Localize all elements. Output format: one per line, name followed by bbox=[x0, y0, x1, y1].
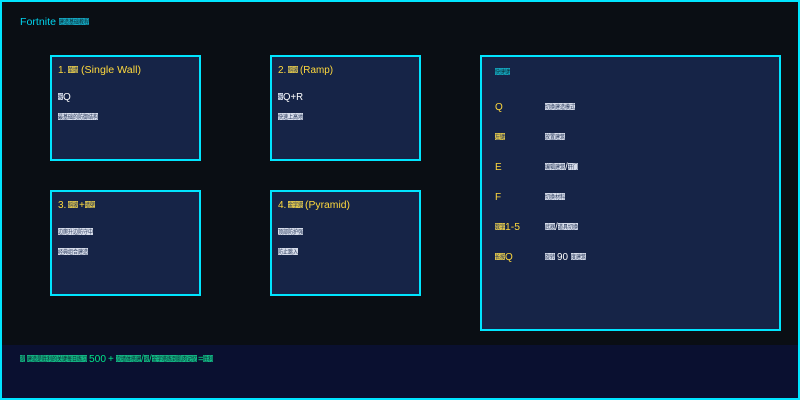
description line one bbox=[278, 228, 303, 236]
description line one bbox=[58, 228, 93, 236]
key instruction: Q bbox=[63, 92, 71, 103]
heading: ramp: 2. bbox=[278, 65, 286, 76]
description line two: 防止跳入 bbox=[278, 248, 298, 256]
row: F bbox=[495, 192, 565, 203]
row: hold Q bbox=[495, 252, 586, 263]
heading: pyramid bbox=[278, 200, 350, 211]
title bbox=[20, 17, 89, 28]
footer tip: + bbox=[108, 354, 114, 365]
panel: pyramid bbox=[271, 191, 420, 295]
row: E: / bbox=[565, 162, 568, 173]
heading: ramp plus wall: 3. bbox=[58, 200, 66, 211]
row: hold Q: 长按 bbox=[495, 253, 505, 261]
row: hold Q: 旋转 bbox=[545, 253, 555, 261]
row: Q: Q bbox=[495, 102, 503, 113]
row: number keys: 武器 bbox=[545, 223, 555, 231]
heading: pyramid: (Pyramid) bbox=[305, 200, 350, 211]
row: left click bbox=[495, 133, 565, 141]
title: 建造基础教程 bbox=[59, 18, 89, 26]
description bbox=[58, 113, 98, 121]
description line two: 经典组合建造 bbox=[58, 248, 88, 256]
footer tip: / bbox=[149, 354, 152, 365]
row: number keys bbox=[495, 222, 578, 233]
row: E bbox=[495, 162, 578, 173]
heading: single wall: (Single Wall) bbox=[81, 65, 141, 76]
row: hold Q: 度建筑 bbox=[571, 253, 586, 261]
row: Q bbox=[495, 102, 575, 113]
description line two bbox=[58, 248, 88, 256]
footer band bbox=[1, 345, 799, 399]
heading: single wall: 单墙 bbox=[68, 66, 78, 74]
description line two bbox=[278, 248, 298, 256]
heading: ramp: (Ramp) bbox=[300, 65, 333, 76]
key instruction: 按 bbox=[278, 93, 283, 101]
row: left click: 放置建筑 bbox=[545, 133, 565, 141]
description line one: 边爬升边防守中 bbox=[58, 228, 93, 236]
description: 快速上高地 bbox=[278, 113, 303, 121]
key bindings heading bbox=[495, 68, 510, 76]
panel: single wall bbox=[51, 56, 200, 160]
heading: ramp plus wall: 墙壁 bbox=[85, 201, 95, 209]
heading: ramp plus wall: 斜坡 bbox=[68, 201, 78, 209]
row: Q: 切换建造模式 bbox=[545, 103, 575, 111]
description: 最基础的防御结构 bbox=[58, 113, 98, 121]
row: hold Q: Q bbox=[505, 252, 513, 263]
heading: ramp bbox=[278, 65, 333, 76]
footer tip: = bbox=[198, 354, 204, 365]
key bindings heading: 快捷键 bbox=[495, 68, 510, 76]
footer tip: 次墙体搭建 bbox=[116, 355, 141, 363]
row: F: 切换材料 bbox=[545, 193, 565, 201]
panel: ramp plus wall bbox=[51, 191, 200, 295]
row: E: 编辑建筑 bbox=[545, 163, 565, 171]
heading: pyramid: 金字塔 bbox=[288, 201, 303, 209]
key instruction: Q+R bbox=[283, 92, 303, 103]
panel: key bindings bbox=[481, 56, 780, 330]
panel: ramp bbox=[271, 56, 420, 160]
row: left click: 左键 bbox=[495, 133, 505, 141]
key instruction: 按 bbox=[58, 93, 63, 101]
footer tip: 提 bbox=[20, 355, 25, 363]
row: E: E bbox=[495, 162, 502, 173]
footer tip: 金字塔练到肌肉记忆 bbox=[152, 355, 197, 363]
heading: single wall bbox=[58, 65, 141, 76]
row: F: F bbox=[495, 192, 501, 203]
heading: ramp plus wall bbox=[58, 200, 95, 211]
heading: single wall: 1. bbox=[58, 65, 66, 76]
footer tip: 坡 bbox=[144, 355, 149, 363]
description line one: 顶部防护强 bbox=[278, 228, 303, 236]
title: Fortnite bbox=[20, 17, 56, 28]
heading: ramp: 斜坡 bbox=[288, 66, 298, 74]
row: E: 开门 bbox=[568, 163, 578, 171]
description bbox=[278, 113, 303, 121]
heading: pyramid: 4. bbox=[278, 200, 286, 211]
row: hold Q: 90 bbox=[557, 252, 568, 263]
footer tip: / bbox=[141, 354, 144, 365]
row: number keys: 1-5 bbox=[505, 222, 520, 233]
key instruction bbox=[58, 92, 71, 103]
row: number keys: / bbox=[555, 222, 558, 233]
heading: ramp plus wall: + bbox=[79, 200, 85, 211]
row: number keys: 道具切换 bbox=[558, 223, 578, 231]
footer tip: 500 bbox=[89, 354, 106, 365]
footer tip bbox=[20, 354, 213, 365]
row: number keys: 数字 bbox=[495, 223, 505, 231]
footer tip: 建造是胜利的关键每日练习 bbox=[27, 355, 87, 363]
footer tip: 胜利 bbox=[203, 355, 213, 363]
